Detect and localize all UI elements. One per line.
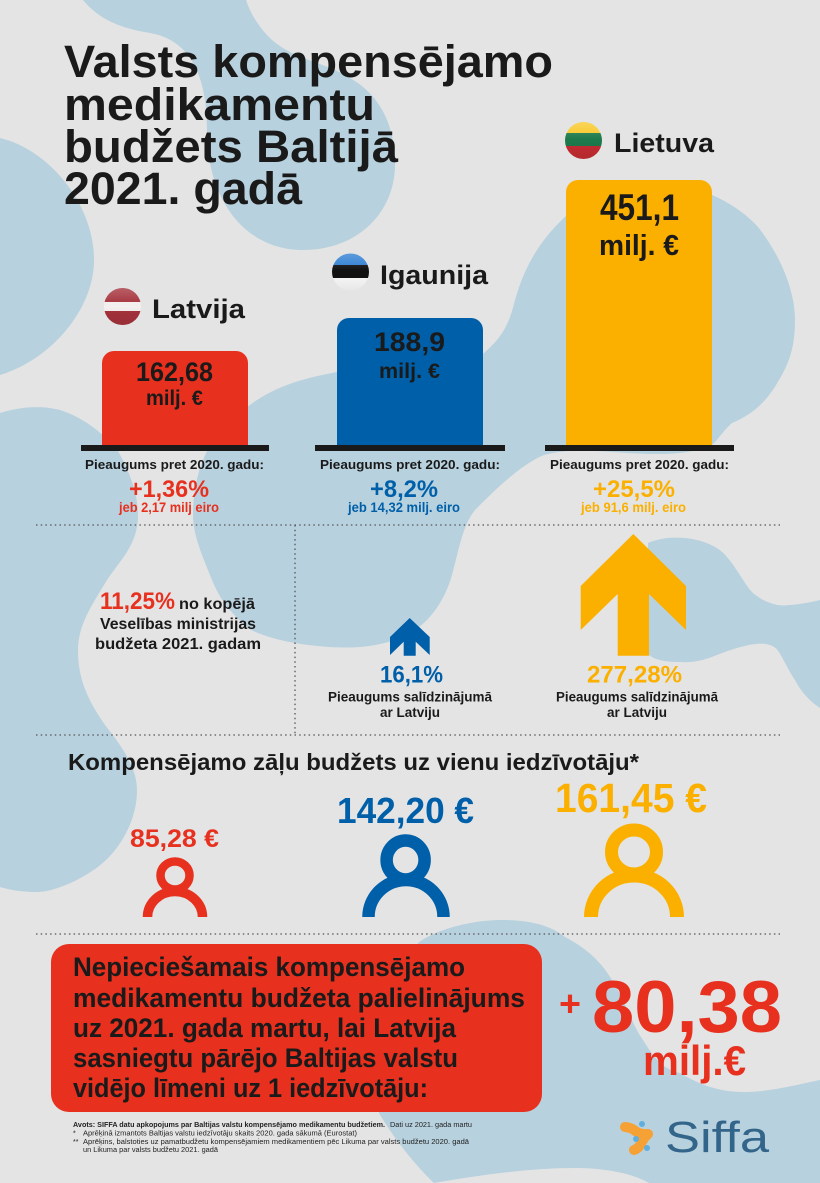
callout text [73, 952, 525, 1103]
value: 142,20 € [337, 790, 474, 831]
baseline bar [315, 445, 505, 451]
caption: ar Latviju [380, 705, 440, 720]
growth text: +8,2% [370, 476, 438, 503]
panel: Estonia comparison [328, 618, 492, 720]
bar: Latvija [102, 351, 248, 445]
footnotes: Dati uz 2021. gada martu [390, 1122, 472, 1129]
unit: milj. € [599, 230, 679, 262]
caption: Pieaugums salīdzinājumā [556, 690, 718, 704]
title [64, 36, 553, 214]
caption [328, 690, 492, 720]
title: Valsts kompensējamo [64, 36, 553, 87]
big number: +80,38 milj.€: 80,38 [592, 967, 782, 1048]
icon: Estonian flag [332, 254, 369, 285]
footnotes: un Likuma par valsts budžetu 2021. gadā [83, 1147, 218, 1154]
text block: share of Health Ministry budget: no kopējā [179, 596, 255, 613]
growth text [85, 457, 264, 515]
country name: Latvija: Latvija [152, 294, 246, 324]
value: 85,28 € [130, 825, 219, 853]
wordmark: Siffa [665, 1113, 770, 1162]
logo: Siffa [625, 1113, 770, 1162]
title: 2021. gadā [64, 163, 303, 214]
growth text: jeb 91,6 milj. eiro [580, 499, 686, 515]
growth text: +1,36% [129, 476, 209, 503]
callout text: medikamentu budžeta palielinājums [73, 983, 525, 1013]
icon: molecule mark [625, 1121, 650, 1151]
callout text: sasniegtu pārējo Baltijas valstu [73, 1043, 458, 1073]
callout text: Nepieciešamais kompensējamo [73, 952, 465, 982]
red panel [51, 944, 542, 1112]
growth text: jeb 14,32 milj. eiro [347, 499, 460, 515]
bar: Lietuva [566, 180, 712, 445]
text block: share of Health Ministry budget: budžeta 2021. gadam [95, 636, 261, 653]
growth text: Pieaugums pret 2020. gadu: [550, 457, 729, 472]
value: 188,9: 188,9 [374, 327, 445, 357]
country name: Igaunija: Igaunija [380, 260, 489, 290]
panel: per-resident Lithuania [555, 775, 707, 917]
icon: person blue [368, 840, 444, 917]
value: 162,68: 162,68 [136, 357, 213, 387]
value: 277,28%: 277,28% [587, 662, 682, 688]
value: 451,1: 451,1 [600, 187, 679, 228]
icon: Lithuanian flag [565, 122, 602, 160]
unit: milj. € [379, 360, 440, 383]
footnotes: ** [73, 1139, 79, 1146]
title: budžets Baltijā [64, 121, 399, 172]
footnotes [73, 1122, 472, 1154]
heading: budget per resident: Kompensējamo zāļu budžets uz vienu iedzīvotāju* [68, 749, 639, 775]
footnotes: Aprēķins, balstoties uz pamatbudžetu kompensējamiem medikamentiem pēc Likuma par valsts budžetu 2020. gadā [83, 1139, 469, 1146]
value: 16,1%: 16,1% [380, 662, 443, 688]
growth text [320, 457, 500, 515]
arrow: yellow up [581, 534, 686, 656]
big number: +80,38 milj.€ [559, 967, 782, 1084]
footnotes: * [73, 1130, 76, 1138]
footnotes: Aprēķinā izmantots Baltijas valstu iedzīvotāju skaits 2020. gada sākumā (Eurostat) [83, 1130, 357, 1138]
title: medikamentu [64, 79, 375, 130]
icon: Latvian flag [104, 288, 141, 326]
panel: Igaunija bar [315, 253, 505, 515]
big number: +80,38 milj.€: milj.€ [643, 1037, 746, 1084]
text block: share of Health Ministry budget: Veselības ministrijas [100, 616, 256, 633]
country name: Lietuva: Lietuva [614, 128, 715, 158]
big number: +80,38 milj.€: + [559, 983, 581, 1024]
growth text: jeb 2,17 milj eiro [118, 499, 219, 515]
baseline bar [81, 445, 269, 451]
growth text: +25,5% [593, 476, 675, 503]
caption [556, 690, 718, 720]
unit: milj. € [146, 387, 203, 410]
arrow: blue up [390, 618, 430, 656]
growth text: Pieaugums pret 2020. gadu: [320, 457, 500, 472]
panel: Lithuania comparison [556, 534, 718, 720]
bar: Igaunija [337, 318, 483, 445]
callout: required budget increase [51, 944, 542, 1112]
caption: Pieaugums salīdzinājumā [328, 690, 492, 704]
caption: ar Latviju [607, 705, 667, 720]
panel: Lietuva bar [545, 122, 734, 515]
growth text [550, 457, 729, 515]
panel: Latvija bar [81, 288, 269, 515]
growth text: Pieaugums pret 2020. gadu: [85, 457, 264, 472]
panel: per-resident Latvia [130, 825, 219, 917]
baseline bar [545, 445, 734, 451]
icon: person yellow [591, 830, 677, 917]
panel: per-resident Estonia [337, 790, 474, 917]
text block: share of Health Ministry budget [95, 588, 261, 653]
footnotes: Avots: SIFFA datu apkopojums par Baltijas valstu kompensējamo medikamentu budžetiem. [73, 1122, 385, 1129]
value: 161,45 € [555, 775, 707, 821]
callout text: vidējo līmeni uz 1 iedzīvotāju: [73, 1073, 428, 1103]
callout text: uz 2021. gada martu, lai Latvija [73, 1013, 457, 1043]
text block: share of Health Ministry budget: 11,25% [100, 588, 175, 615]
icon: person red [148, 862, 202, 917]
